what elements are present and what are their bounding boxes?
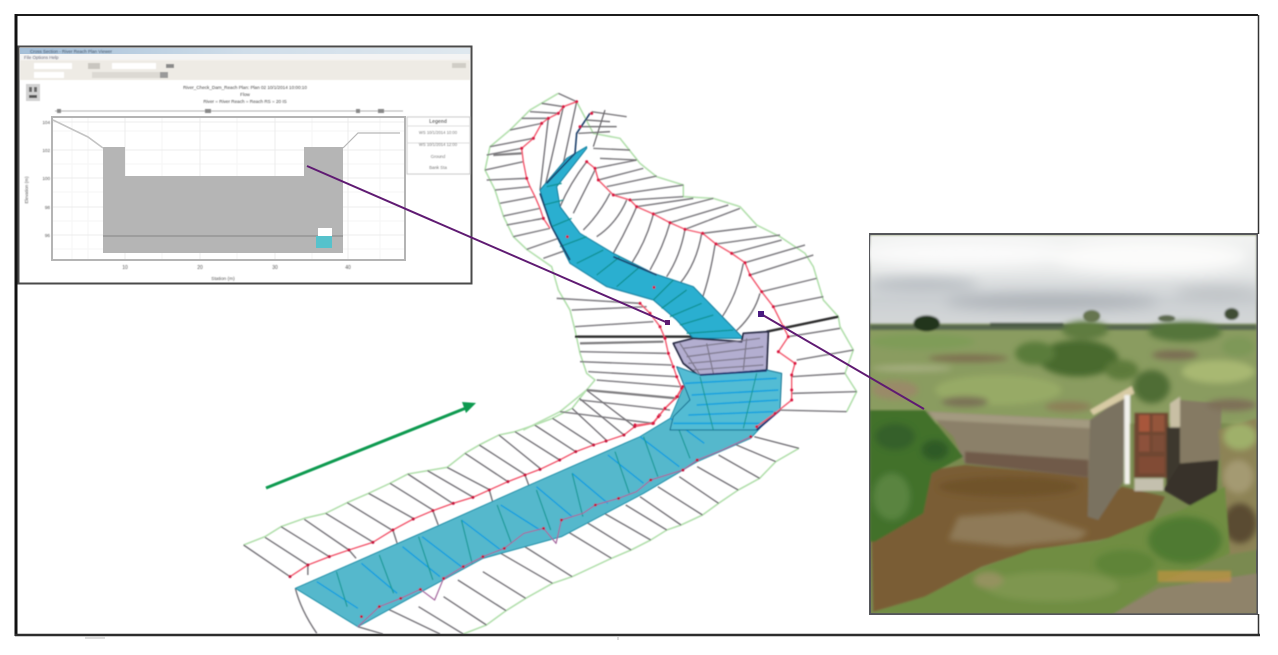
structure interior lines <box>680 338 763 375</box>
window toolbar <box>20 60 470 80</box>
camera date stamp <box>1158 571 1231 582</box>
y axis tick labels: 104 <box>42 120 50 125</box>
chart title: Flow <box>240 92 251 97</box>
legend: Legend <box>429 119 447 125</box>
upper reach right overbank cross-sections <box>560 160 857 412</box>
dark channel edge <box>540 113 657 275</box>
water reflection <box>938 477 1088 547</box>
upper reach water channel <box>540 147 743 338</box>
lower reach water surface <box>295 380 779 627</box>
muddy water <box>872 465 1165 612</box>
gate opening <box>318 228 332 236</box>
x axis tick labels: 40 <box>345 265 351 271</box>
cross-section viewer window <box>18 46 472 284</box>
x axis tick labels <box>122 265 351 271</box>
structure downstream water lines <box>673 378 778 423</box>
y axis tick labels: 100 <box>42 176 50 181</box>
upper reach thick gray cross-sections <box>493 153 677 398</box>
y axis tick labels: 98 <box>45 205 50 210</box>
chart frame <box>52 117 405 260</box>
lower reach of the river <box>244 380 799 634</box>
water level line <box>103 235 343 237</box>
photo frame <box>870 234 1257 614</box>
lower reach water section lines <box>317 418 704 608</box>
lower reach red bank line <box>290 387 683 577</box>
weir body <box>103 147 343 253</box>
clouds <box>855 240 1262 310</box>
cross-section chart <box>52 117 405 260</box>
window background <box>18 46 472 284</box>
x axis tick labels: 20 <box>197 265 203 271</box>
lower reach purple right bank line <box>358 437 751 627</box>
chart top scale <box>55 109 403 113</box>
legend: WS 10/1/2014 12:00 <box>419 142 458 147</box>
upper reach floodplain envelope <box>485 93 857 430</box>
window title bar: Cross Section - River Reach Plan Viewer <box>30 49 112 54</box>
photo of the check dam <box>855 234 1262 615</box>
gauge staff <box>1124 395 1130 484</box>
upper reach bank station markers <box>522 102 795 427</box>
lower reach floodplain envelope <box>244 390 799 634</box>
chart title: River = River Reach = Reach RS = 20 IS <box>203 99 287 104</box>
legend: Ground <box>431 154 446 159</box>
foreground rock <box>1112 573 1257 615</box>
photo content <box>855 235 1262 615</box>
foreground grass <box>873 487 1230 615</box>
dark pier base <box>1167 427 1180 489</box>
lower reach cross-section lines <box>244 390 799 634</box>
water below the structure <box>670 367 782 430</box>
chart grid <box>52 118 405 260</box>
left bush highlights <box>873 423 948 520</box>
wingwall top ledge <box>1090 386 1134 415</box>
y axis title: Elevation (m) <box>24 176 29 204</box>
shaded outlet <box>1163 460 1218 508</box>
right pier <box>1170 397 1182 430</box>
legend <box>407 117 470 174</box>
window title bar <box>20 48 470 54</box>
left bush <box>870 410 963 542</box>
sky <box>870 235 1257 326</box>
purple leader line to cross-section <box>307 166 670 325</box>
y axis tick labels: 96 <box>45 233 50 238</box>
purple leader line to photo <box>758 311 924 409</box>
x axis tick labels: 10 <box>122 265 128 271</box>
river reach plan model <box>244 93 857 634</box>
upper reach red bank lines <box>522 102 795 427</box>
steel gate <box>1134 413 1168 491</box>
ground profile <box>53 120 103 148</box>
upper reach tangled headwater lines <box>578 110 637 160</box>
distant trees <box>913 308 1239 331</box>
green flow direction arrow <box>266 402 476 488</box>
foreground grass tones <box>973 517 1222 602</box>
plot icon button <box>26 84 40 101</box>
wingwall <box>1088 395 1125 520</box>
check dam structure <box>673 332 768 377</box>
y axis tick labels <box>42 120 50 238</box>
legend: WS 10/1/2014 10:00 <box>419 130 458 135</box>
field texture <box>868 321 1255 412</box>
back wall details <box>928 412 1092 477</box>
thick black structure alignment lines <box>575 317 838 337</box>
right abutment <box>1180 400 1222 463</box>
lower reach bank station markers <box>290 387 751 617</box>
back weir wall <box>928 412 1090 462</box>
horizon band <box>870 325 1257 330</box>
y axis tick labels: 102 <box>42 148 50 153</box>
upper reach water section lines <box>543 183 733 333</box>
window menu bar: File Options Help <box>24 55 59 60</box>
right bank highlights <box>1207 399 1257 543</box>
legend: Bank Sta <box>429 165 447 170</box>
x axis title: Station (m) <box>211 276 235 282</box>
x axis tick labels: 30 <box>272 265 278 271</box>
right bank <box>1218 418 1257 555</box>
upper reach left overbank cross-sections <box>485 93 680 423</box>
field <box>870 323 1257 423</box>
chart title: River_Check_Dam_Reach Plan: Plan 02 10/1/2014 10:00:10 <box>183 85 307 90</box>
window menu bar <box>20 54 470 60</box>
chart title <box>183 85 307 104</box>
water in gate opening <box>316 236 332 248</box>
upper reach of the river <box>485 93 857 430</box>
